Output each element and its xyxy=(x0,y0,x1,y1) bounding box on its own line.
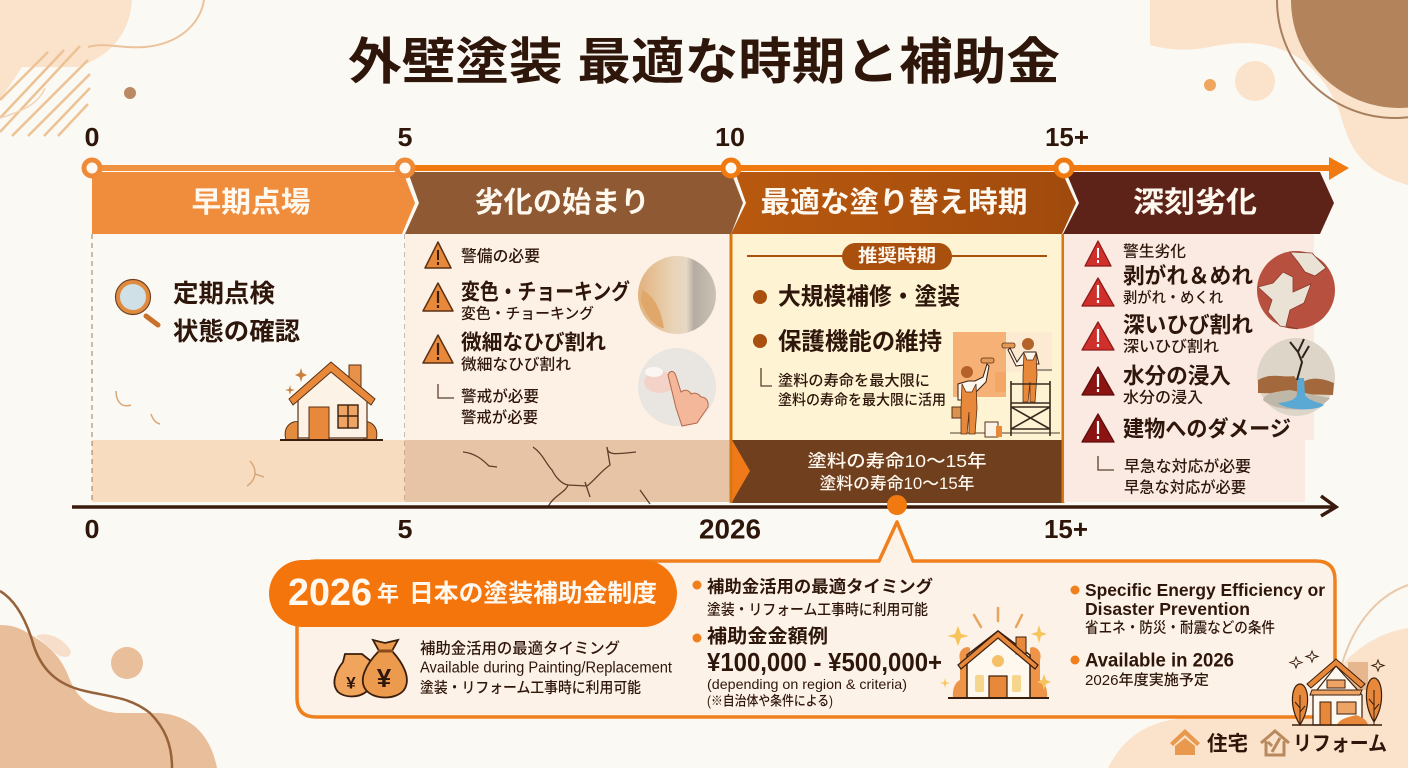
lower timeline labels: 5 xyxy=(398,514,412,544)
warning: aged deterioration xyxy=(1085,241,1186,266)
text: optimal timing: 補助金活用の最適タイミング xyxy=(420,640,620,658)
badge: recommended period xyxy=(747,243,1047,270)
text: optimal timing: 塗装・リフォーム工事時に利用可能 xyxy=(420,680,641,696)
photo: peeling paint xyxy=(1257,251,1335,329)
badge: recommended period: 推奨時期 xyxy=(858,246,936,266)
warning: aged deterioration: 警生劣化 xyxy=(1123,242,1186,260)
banner: paint lifespan 10 to 15 years: 塗料の寿命10〜15年 xyxy=(808,451,986,471)
phase: severe deterioration xyxy=(1063,172,1334,234)
warning item: need for caution xyxy=(425,242,540,268)
bullet: eligibility conditions: Disaster Prevention xyxy=(1085,599,1250,619)
panel: optimal repainting xyxy=(730,234,1064,503)
bullet: subsidy amount: (depending on region & criteria) xyxy=(707,676,907,692)
heading pill: 日本の塗装補助金制度 xyxy=(409,580,657,608)
text: optimal timing: Available during Painting/Replacement xyxy=(420,660,673,676)
warning: peeling xyxy=(1082,264,1253,306)
note: paint lifespan xyxy=(761,368,946,409)
phase: severe deterioration: 深刻劣化 xyxy=(1133,186,1257,219)
lower timeline labels: 0 xyxy=(84,514,100,544)
warning item: discoloration and chalking: 変色・チョーキング xyxy=(461,304,594,322)
text: regular inspection xyxy=(173,280,300,346)
heading pill: 2026 xyxy=(288,572,372,614)
bullet: availability: Available in 2026 xyxy=(1085,650,1234,672)
warning: water intrusion: 水分の浸入 xyxy=(1123,388,1204,406)
text: optimal timing xyxy=(420,640,673,696)
icon: glowing house xyxy=(940,608,1051,698)
icon: money bags xyxy=(334,640,407,698)
icon: house xyxy=(280,362,383,440)
note: paint lifespan: 塗料の寿命を最大限に xyxy=(778,372,930,390)
warning: deep cracks: 深いひび割れ xyxy=(1123,338,1220,356)
bullet: best timing: 塗装・リフォーム工事時に利用可能 xyxy=(707,602,928,618)
text: regular inspection: 定期点検 xyxy=(173,280,275,308)
logo: housing and reform: リフォーム xyxy=(1293,732,1387,756)
logo: housing and reform: 住宅 xyxy=(1207,732,1248,756)
warning: peeling: 剥がれ・めくれ xyxy=(1123,288,1223,306)
bullet: subsidy amount xyxy=(692,626,942,708)
illustration: painters on scaffold xyxy=(950,332,1060,437)
warning: peeling: 剥がれ＆めれ xyxy=(1123,264,1253,288)
bullet: best timing: 補助金活用の最適タイミング xyxy=(707,576,933,596)
title: 外壁塗装 最適な時期と補助金 xyxy=(348,34,1060,90)
bullet: eligibility conditions xyxy=(1070,580,1325,636)
phase: optimal repaint timing xyxy=(731,172,1076,234)
bullet: major repairs: 大規模補修・塗装 xyxy=(778,284,960,310)
note: urgent response required xyxy=(1098,456,1251,496)
phase: start of deterioration xyxy=(405,172,743,234)
warning: deep cracks xyxy=(1082,312,1253,356)
warning item: need for caution: 警備の必要 xyxy=(461,246,540,266)
upper timeline year labels: 10 xyxy=(715,122,745,152)
bullet: availability: 2026年度実施予定 xyxy=(1085,672,1209,689)
upper timeline year labels: 15+ xyxy=(1045,122,1089,152)
upper timeline year labels xyxy=(84,122,1089,152)
panel: severe deterioration xyxy=(1064,234,1335,502)
warning item: discoloration and chalking xyxy=(423,280,630,322)
caution note: 警戒が必要 xyxy=(461,386,539,406)
ribbon: phase headers xyxy=(92,172,1334,234)
top timeline arrow xyxy=(84,157,1349,180)
warning: building damage: 建物へのダメージ xyxy=(1123,416,1291,442)
heading pill: 年 xyxy=(377,582,399,606)
bullet: eligibility conditions: 省エネ・防災・耐震などの条件 xyxy=(1085,620,1275,636)
warning: water intrusion xyxy=(1082,364,1231,406)
photo: crack with water xyxy=(1257,338,1335,416)
bullet: eligibility conditions: Specific Energy Efficiency or xyxy=(1085,580,1325,600)
icon: corner house with trees xyxy=(1290,651,1384,725)
bullet: maintain protection: 保護機能の維持 xyxy=(778,328,942,356)
warning item: discoloration and chalking: 変色・チョーキング xyxy=(461,280,630,304)
warning: water intrusion: 水分の浸入 xyxy=(1123,364,1231,388)
panel: early inspection xyxy=(92,234,405,502)
heading pill xyxy=(269,560,677,627)
banner: paint lifespan 10 to 15 years: 塗料の寿命10〜15年 xyxy=(820,474,974,493)
warning: deep cracks: 深いひび割れ xyxy=(1123,312,1253,338)
banner: paint lifespan 10 to 15 years xyxy=(808,451,986,493)
note: paint lifespan: 塗料の寿命を最大限に活用 xyxy=(778,391,946,409)
lower timeline labels: 2026 xyxy=(699,514,761,544)
bullet: subsidy amount: ¥100,000 - ¥500,000+ xyxy=(707,647,942,677)
lower timeline labels xyxy=(84,514,1088,544)
icon: money bags: ¥ xyxy=(346,674,356,692)
caution note: 警戒が必要 xyxy=(461,408,538,426)
note: urgent response required: 早急な対応が必要 xyxy=(1124,478,1246,496)
logo: housing and reform xyxy=(1170,729,1387,756)
bullet: subsidy amount: (※自治体や条件による) xyxy=(707,692,833,708)
warning: building damage xyxy=(1082,414,1291,442)
photo: chalking wall xyxy=(638,256,716,334)
text: regular inspection: 状態の確認 xyxy=(173,318,300,346)
phase: start of deterioration: 劣化の始まり xyxy=(474,186,650,219)
bullet: availability xyxy=(1070,650,1234,689)
icon: magnifying glass xyxy=(116,280,158,325)
icon: money bags: ¥ xyxy=(377,663,392,693)
bullet: best timing xyxy=(692,576,933,618)
warning item: fine cracks: 微細なひび割れ xyxy=(461,332,606,354)
caution note xyxy=(438,384,539,426)
bottom timeline arrow xyxy=(72,495,1336,516)
warning item: fine cracks xyxy=(423,332,606,374)
warning item: fine cracks: 微細なひび割れ xyxy=(461,356,571,374)
upper timeline year labels: 0 xyxy=(84,122,100,152)
bullet: subsidy amount: 補助金金額例 xyxy=(707,626,828,648)
panel: beginning of deterioration xyxy=(405,234,730,507)
note: urgent response required: 早急な対応が必要 xyxy=(1124,456,1251,476)
phase: early inspection xyxy=(92,172,415,234)
upper timeline year labels: 5 xyxy=(398,122,412,152)
panel: 2026 subsidy callout xyxy=(269,522,1335,717)
lower timeline labels: 15+ xyxy=(1044,514,1088,544)
phase: optimal repaint timing: 最適な塗り替え時期 xyxy=(760,186,1028,219)
photo: finger on chalky wall xyxy=(638,348,716,426)
phase: early inspection: 早期点場 xyxy=(192,186,310,219)
